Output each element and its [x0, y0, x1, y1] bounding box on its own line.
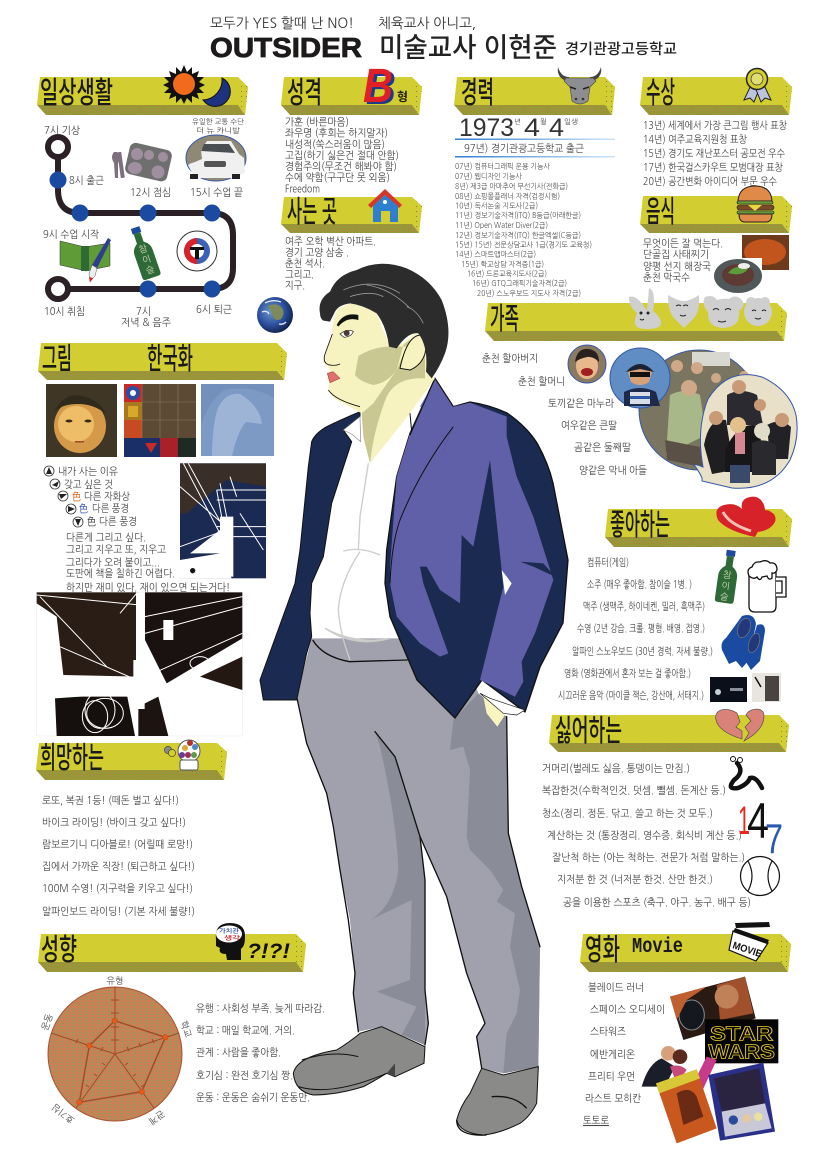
likes list: 맥주 (생맥주, 하이네켄, 밀러, 흑맥주)	[583, 601, 705, 612]
banner: 희망하는: 희망하는	[40, 733, 104, 777]
title	[210, 16, 677, 65]
banner: 성격: 성격	[287, 68, 322, 112]
banner: 사는 곳: 사는 곳	[287, 187, 337, 231]
icon: numbers 147: 4	[747, 793, 769, 849]
family list: 양같은 막내 아들	[579, 465, 647, 476]
certificate list: 14년) 스마트앱마스터(2급)	[455, 250, 536, 259]
radar chart: 유형	[107, 976, 123, 986]
icon: soju bottle: 참	[722, 569, 733, 581]
dislikes list: 계산하는 것 (통장정리. 영수증. 회식비 계산 등.)	[547, 830, 742, 841]
painting: superhero tiles	[124, 384, 196, 457]
banner: 수상	[640, 68, 792, 115]
award list: 14년) 여주교육지원청 표창	[643, 134, 747, 145]
shirt neck line	[410, 413, 412, 432]
icon: baseball	[740, 856, 780, 896]
icon: question and exclamation: ?!?!	[247, 940, 290, 963]
shirt collar	[343, 417, 361, 442]
icon: blood type B: B	[366, 62, 396, 115]
icon: hearts	[716, 497, 776, 537]
icon: soju bottle: 이	[141, 253, 152, 266]
icon: lunch tray	[112, 142, 173, 183]
banner: 경력: 경력	[461, 68, 494, 112]
icon: clapperboard: MOVIE	[731, 940, 763, 960]
eyebrow and eye	[337, 314, 358, 327]
description text: 다른게 그리고 싶다.	[66, 532, 146, 543]
shirt hem line	[313, 640, 408, 662]
banner: 가족	[485, 294, 787, 341]
icon: blood type B: B	[363, 60, 393, 113]
icon: book and brush	[60, 238, 111, 282]
timeline labels: 12시 점심	[130, 187, 171, 198]
certificate list: 11년) 정보기술자격(ITQ) B등급(아래한글)	[455, 211, 581, 220]
poster: Star Wars: STAR	[710, 1024, 774, 1046]
certificate list	[455, 162, 592, 298]
panel: 싫어하는	[542, 706, 789, 908]
banner: 가족: 가족	[490, 294, 519, 338]
birth date: 1973	[459, 114, 514, 142]
family list: 토끼같은 마누라	[548, 398, 614, 409]
wish list: 바이크 라이딩! (바이크 갖고 싶다!)	[42, 817, 186, 828]
award list: 20년) 공간변화 아이디어 부문 우수	[643, 176, 777, 187]
timeline labels: 8시 출근	[69, 175, 104, 186]
likes list: 수영 (2년 강습. 크롤. 평형. 배영. 접영.)	[577, 623, 705, 634]
cuff and hand	[480, 693, 525, 727]
wish list: 100M 수영! (지구력을 키우고 싶다!)	[42, 883, 193, 894]
poster: Evangelion	[708, 1063, 775, 1141]
timeline labels: 10시 취침	[44, 306, 85, 317]
movie list: 라스트 모히칸	[585, 1093, 641, 1104]
movie list: 스타워즈	[590, 1026, 626, 1037]
certificate list: 08년) 쇼핑몰플래너 자격(검정시험)	[455, 192, 560, 201]
description text: 그리고 지우고 또, 지우고	[66, 544, 166, 555]
banner: 영화 Movie: 영화	[585, 925, 620, 969]
banner: 음식	[640, 187, 792, 233]
icon: swim fins	[722, 615, 765, 670]
banner: 좋아하는	[605, 500, 792, 547]
personality list: 경험주의(무조건 해봐야 함)	[285, 161, 397, 172]
certificate list: 10년) 독서논술 지도사(2급)	[455, 202, 538, 210]
radar chart: 학교	[178, 1019, 193, 1039]
movie list: 프리티 우먼	[588, 1071, 635, 1082]
icon: moon	[203, 78, 230, 106]
banner: 성향	[38, 925, 306, 972]
certificate list: 15년) 15년) 전문상담교사 1급(경기도 교육청)	[455, 240, 592, 250]
nose and lips	[324, 334, 360, 407]
banner: 영화 Movie	[580, 925, 791, 972]
compass list: 色	[79, 503, 88, 514]
food photos	[714, 235, 789, 293]
painting: blue landscape	[201, 384, 274, 456]
icon: soju bottle: 참	[137, 243, 149, 255]
panel: 사는 곳	[257, 187, 422, 333]
certificate list: 07년) 컴퓨터그래픽 운용 기능사	[455, 162, 551, 171]
personality list: 내성적(쑥스러움이 많음)	[285, 139, 385, 150]
icon: worm	[730, 756, 762, 788]
icon: clapperboard	[729, 922, 770, 961]
award list: 15년) 경기도 재난포스터 공모전 우수	[643, 148, 785, 159]
personality list: 가훈 (바른마음)	[285, 116, 349, 128]
icon: blood type B: 형	[397, 88, 408, 105]
panel: 성향	[38, 923, 325, 1126]
banner: 그림 한국화	[38, 334, 287, 380]
shoes	[293, 1027, 538, 1135]
family list: 춘천 할아버지	[482, 353, 538, 364]
icon: bull	[558, 67, 601, 104]
personality list	[285, 116, 399, 194]
certificate list: 8년) 제3급 아마추어 무선기사(전화급)	[455, 182, 568, 191]
tendency list	[196, 1003, 325, 1103]
icon: numbers 147	[738, 793, 783, 862]
upper body	[260, 264, 568, 718]
family list	[482, 353, 647, 476]
radar chart: 운동	[40, 1012, 55, 1032]
painting: portrait	[46, 384, 117, 457]
panel: 일상생활	[37, 65, 248, 328]
panel: 경력	[454, 67, 615, 298]
compass list: 色	[87, 516, 96, 527]
address list: 여주 오학 벽산 아파트.	[285, 236, 376, 247]
panel: 수상	[640, 68, 792, 187]
likes list	[558, 557, 713, 701]
icon: soju bottle: 슬	[719, 591, 730, 602]
personality list: Freedom	[285, 184, 320, 194]
album covers	[710, 673, 781, 702]
poster: Star Wars: WARS	[708, 1041, 775, 1063]
timeline route	[48, 137, 233, 299]
address list: 경기 고양 삼송 .	[285, 247, 349, 258]
family list: 춘천 할머니	[518, 376, 565, 387]
description text: 그리다가 오려 붙이고...	[66, 557, 160, 568]
wish list: 람보르기니 디아블로! (어릴때 로망!)	[42, 839, 193, 850]
likes list: 시끄러운 음악 (마이클 잭슨, 강산애, 서태지.)	[558, 690, 704, 701]
shirt folds	[325, 463, 390, 660]
tendency list: 호기심 : 완전 호기심 짱.	[196, 1070, 293, 1081]
icon: soju bottle: 이	[721, 580, 731, 591]
icon: soju bottle: 슬	[145, 264, 156, 276]
certificate list: 16년) GTQ그래픽기술자격(2급)	[472, 279, 567, 288]
birth date: 월	[540, 118, 547, 126]
tendency list: 학교 : 매일 학교에. 거의.	[196, 1025, 295, 1036]
hair	[320, 264, 448, 378]
address list: 춘천 석사.	[285, 258, 325, 269]
title: 미술교사 이현준	[379, 26, 557, 65]
icon: numbers 147: 7	[765, 815, 783, 862]
likes list: 영화 (영화관에서 혼자 보는 걸 좋아함.)	[564, 668, 691, 679]
icon: car	[186, 135, 246, 181]
icon: numbers 147: 1	[738, 799, 750, 843]
banner: 성격	[281, 68, 422, 115]
title: 경기관광고등학교	[565, 38, 677, 59]
timeline labels: 유일한 교통 수단	[192, 118, 244, 126]
icon: school emblem	[177, 231, 217, 271]
movie posters	[642, 977, 778, 1143]
trousers	[297, 638, 540, 1073]
panel: 가족	[482, 288, 797, 488]
timeline labels: 7시 기상	[44, 125, 80, 136]
food list: 춘천 막국수	[643, 272, 690, 283]
radar chart: 관계	[147, 1108, 167, 1126]
icon: head with thoughts: 생각	[224, 934, 241, 941]
movie list: 에반게리온	[590, 1049, 635, 1060]
address list	[285, 236, 376, 291]
family photos	[568, 345, 797, 488]
ear	[400, 335, 426, 370]
icon: broken heart	[716, 709, 764, 741]
certificate list: 16년) 드론교육지도사(2급)	[467, 270, 547, 278]
description text: 도판에 책을 칠하긴 어렵다.	[66, 568, 175, 579]
description text	[66, 532, 230, 593]
panel: 영화 Movie	[580, 922, 791, 1143]
panel: 희망하는	[36, 733, 227, 917]
wish list: 집에서 가까운 직장! (퇴근하고 싶다!)	[42, 861, 195, 872]
timeline labels: 9시 수업 시작	[43, 229, 99, 240]
tendency list: 유행 : 사회성 부족. 늦게 따라감.	[196, 1003, 325, 1014]
award list	[643, 120, 787, 187]
timeline labels: 저녁 & 음주	[121, 317, 171, 328]
poster: Star Wars	[705, 1019, 778, 1063]
icon: head with thoughts	[216, 923, 245, 960]
icon: sun	[163, 65, 205, 104]
icon: medal	[744, 68, 771, 102]
banner: 그림 한국화: 한국화	[147, 334, 193, 378]
panel: 좋아하는	[558, 497, 792, 702]
wish list: 로또, 복권 1등! (떼돈 벌고 싶다!)	[42, 795, 179, 806]
certificate list: 12년) 정보기술자격(ITQ) 한글엑셀(C등급)	[455, 231, 581, 240]
poster: Pretty Woman	[642, 1046, 717, 1090]
banner: 사는 곳	[281, 187, 422, 233]
banner: 경력	[454, 68, 615, 115]
timeline labels	[43, 118, 244, 328]
panel: 음식	[640, 186, 792, 293]
icon: rabbit, fox, bear, sheep faces	[629, 288, 772, 329]
birth date: 년	[514, 118, 521, 126]
likes list: 알파인 스노우보드 (30년 경력. 자세 불량.)	[572, 646, 713, 657]
icon: soju bottle	[714, 549, 741, 604]
certificate list: 15년) 학교상담 자격증(1급)	[461, 260, 544, 269]
banner: 수상: 수상	[646, 68, 675, 112]
food list: 양평 선지 해장국	[643, 261, 711, 272]
jacket highlight	[390, 381, 553, 697]
movie list: 블레이드 러너	[588, 982, 644, 993]
title: OUTSIDER	[210, 32, 362, 63]
banner: 싫어하는: 싫어하는	[555, 706, 622, 750]
compass list: 다른 자화상	[84, 491, 130, 502]
timeline labels: 15시 수업 끝	[190, 187, 243, 198]
icon: house	[368, 189, 402, 222]
figure: man illustration	[260, 264, 568, 1135]
timeline labels: 7시	[136, 306, 151, 317]
birth date: 일생	[564, 118, 578, 126]
panel: 성격	[281, 60, 422, 194]
icon: beer mug	[748, 561, 786, 612]
likes list: 컴퓨터(게임)	[587, 557, 629, 568]
family list: 여우같은 큰딸	[561, 420, 617, 431]
dislikes list: 공을 이용한 스포츠 (축구. 야구. 농구. 배구 등)	[563, 897, 751, 908]
wish list	[42, 795, 195, 917]
panel: 그림 한국화	[37, 334, 287, 736]
family list: 곰같은 둘째딸	[574, 442, 631, 453]
address list: 그리고.	[285, 269, 314, 280]
food list	[643, 238, 723, 283]
radar chart: 호기심	[50, 1102, 76, 1125]
banner: 영화 Movie: Movie	[632, 936, 683, 959]
compass list	[44, 466, 137, 527]
certificate list: 11년) Open Water Diver(2급)	[455, 221, 548, 230]
compass list: 갖고 싶은 것	[64, 479, 113, 490]
icon: burger	[737, 186, 774, 222]
wish list: 알파인보드 라이딩! (기본 자세 불량!)	[42, 906, 195, 917]
likes list: 소주 (매우 좋아함. 참이슬 1병. )	[587, 579, 692, 590]
painting: blue utility pole	[180, 463, 266, 578]
neck and face	[323, 303, 435, 463]
award list: 17년) 한국걸스카우트 모범대장 표창	[643, 162, 783, 173]
poster: Blade Runner	[670, 977, 756, 1040]
right jacket	[385, 378, 568, 718]
address list: 지구.	[285, 280, 305, 291]
award list: 13년) 세계에서 가장 큰그림 행사 표창	[643, 120, 787, 131]
title: 모두가 YES 할때 난 NO!	[210, 16, 354, 31]
tendency list: 운동 : 운동은 숨쉬기 운동만.	[196, 1092, 310, 1103]
banner: 희망하는	[36, 733, 227, 780]
birth date: 97년) 경기관광고등학교 출근	[464, 143, 584, 154]
poster: Last of the Mohicans	[656, 1069, 717, 1143]
dislikes list: 거머리(벌레도 싫음. 통뎅이는 만짐.)	[542, 763, 690, 774]
personality list: 고집(하기 싫은건 절대 안함)	[285, 150, 399, 161]
icon: soju bottle	[126, 224, 161, 281]
certificate list: 07년) 웹디자인 기능사	[455, 172, 523, 181]
banner: 싫어하는	[549, 706, 789, 752]
banner: 일상생활	[37, 68, 248, 115]
tendency list: 관계 : 사람을 좋아함.	[196, 1047, 281, 1058]
dislikes list	[542, 763, 751, 908]
compass list: 다른 풍경	[99, 516, 137, 527]
timeline labels: 6시 퇴근	[196, 304, 232, 315]
movie list: 스페이스 오디세이	[590, 1004, 665, 1015]
icon: head with thoughts: 가치관	[219, 927, 239, 934]
food list: 무엇이든 잘 먹는다.	[643, 238, 723, 249]
icon: gumball machine	[164, 740, 200, 770]
dislikes list: 청소(정리. 정돈. 닦고. 쓸고 하는 것 모두.)	[542, 808, 713, 819]
icon: earth	[257, 297, 293, 333]
banner: 음식: 음식	[646, 187, 675, 231]
compass list: 내가 사는 이유	[58, 466, 118, 477]
dislikes list: 잘난척 하는 (아는 척하는. 전문가 처럼 말하는.)	[552, 852, 745, 863]
personality list: 좌우명 (후회는 하지말자)	[285, 128, 388, 138]
birth date: 4	[549, 114, 564, 142]
banner: 성향: 성향	[41, 925, 77, 969]
dislikes list: 지저분 한 것 (너저분 한것. 산만 한것.)	[557, 874, 713, 885]
radar chart	[40, 976, 193, 1126]
title: 체육교사 아니고,	[378, 16, 476, 31]
compass list: 다른 풍경	[92, 503, 129, 514]
movie list: 토토로	[583, 1115, 609, 1126]
painting: black utility pole	[37, 592, 242, 736]
compass list: 色	[72, 491, 81, 502]
banner: 일상생활: 일상생활	[40, 68, 113, 112]
left sleeve	[260, 412, 360, 700]
dislikes list: 복잡한것(수학적인것. 덧셈. 뺄셈. 돈계산 등.)	[542, 785, 726, 796]
timeline labels: 더 뉴 카니발	[196, 127, 240, 135]
personality list: 수에 약함(구구단 못 외움)	[285, 172, 390, 183]
description text: 하지만 재미 있다. 재이 있으면 되는거다!	[66, 582, 230, 593]
banner: 좋아하는: 좋아하는	[610, 500, 670, 544]
certificate list: 20년) 스노우보드 지도사 자격(2급)	[477, 289, 581, 298]
birth date: 4	[524, 114, 540, 142]
banner: 그림 한국화: 그림	[42, 334, 72, 378]
birth date	[455, 114, 615, 158]
food list: 단골집 사태찌기	[643, 249, 709, 260]
movie list	[583, 982, 665, 1126]
face shadow	[355, 339, 425, 463]
